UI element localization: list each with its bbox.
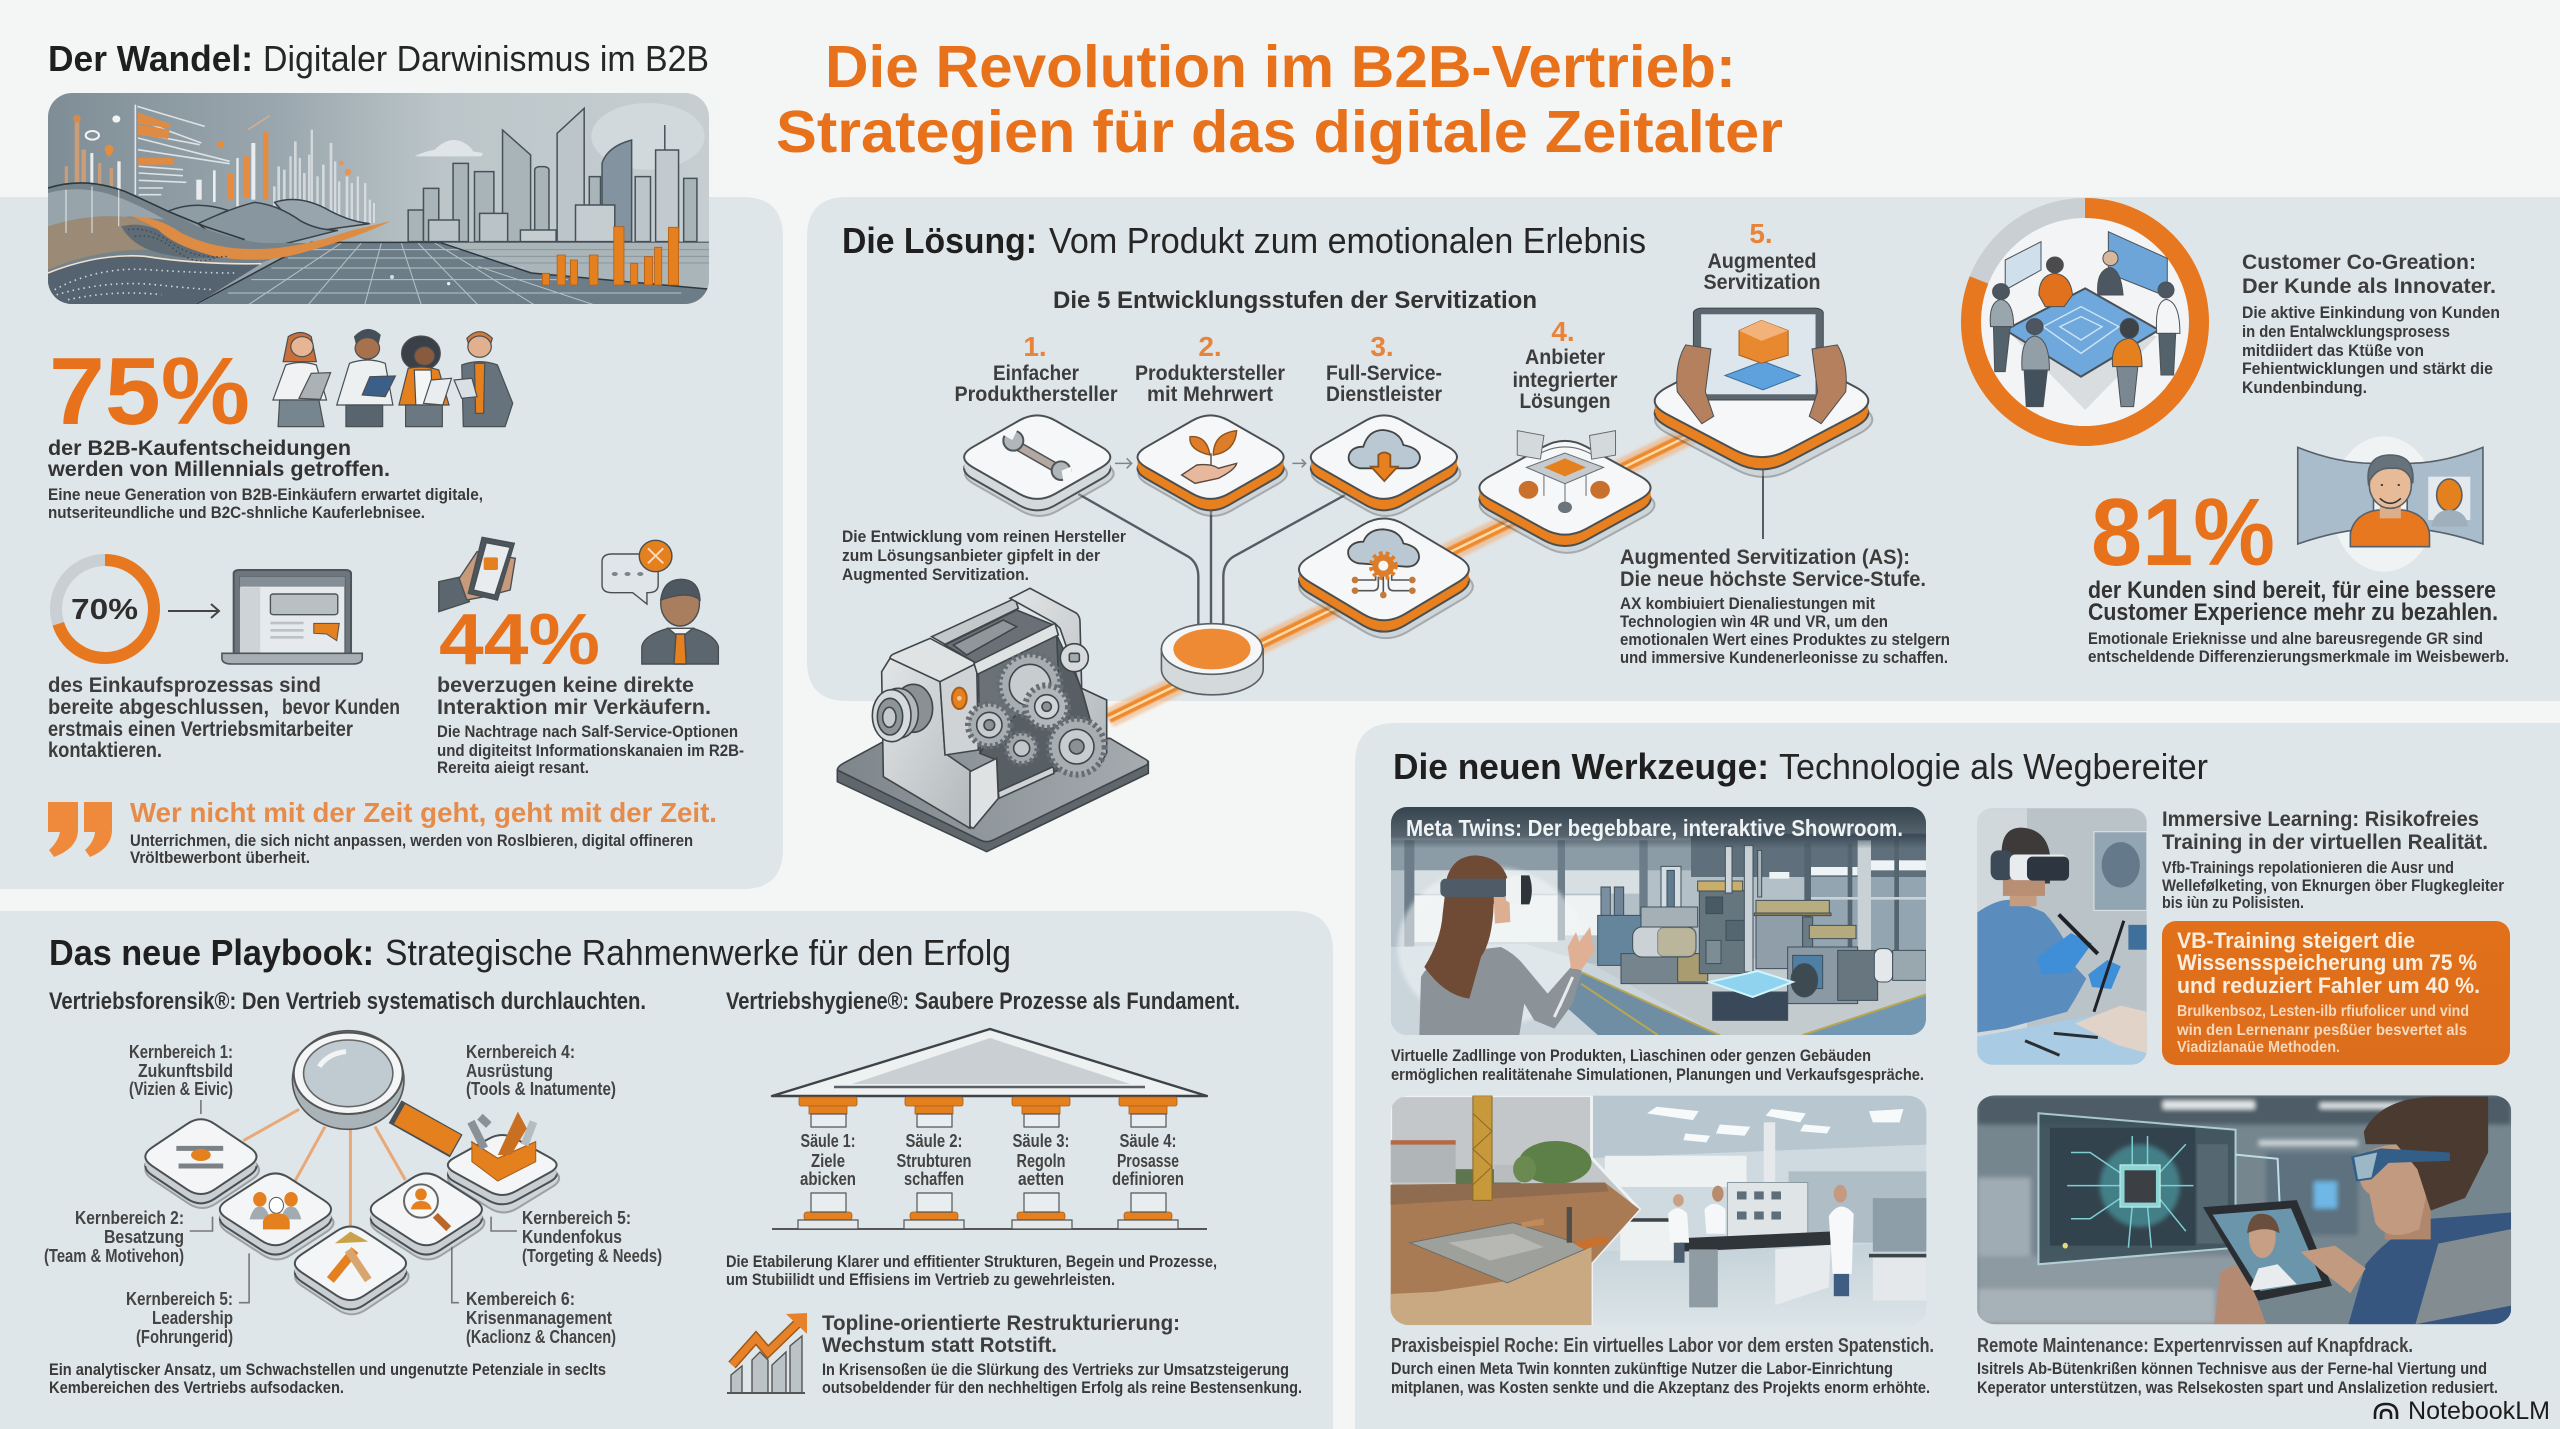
figure 4 <box>454 332 513 427</box>
icon: cloud with gear network <box>1348 529 1419 598</box>
city <box>408 108 697 242</box>
stage labels 1-5: Full-Service- <box>1326 362 1442 385</box>
icon: salesperson with speech bubble <box>602 540 718 664</box>
heading: Der Wandel: Der Wandel: <box>48 38 253 79</box>
text: 44 percent description: beverzugen keine direkte <box>437 674 694 697</box>
pillar labels: Säule 1: <box>800 1131 856 1151</box>
icon: wrench <box>1003 427 1072 482</box>
callout: VR training stats <box>2162 921 2510 1065</box>
diagram: six core areas under magnifier <box>145 1031 559 1314</box>
stage labels 1-5: Produktersteller <box>1135 362 1285 385</box>
stage labels 1-5: 4. <box>1551 316 1575 347</box>
main title <box>776 34 1783 165</box>
callout: VR training stats: und reduziert Fahler um 40 %. <box>2177 973 2480 998</box>
icon: laptop <box>222 570 362 664</box>
stage labels 1-5: Lösungen <box>1520 390 1610 413</box>
woman with VR headset <box>1398 855 1594 1035</box>
heading: Das neue Playbook: Das neue Playbook: <box>49 932 374 973</box>
pillar labels: Säule 2: <box>906 1131 962 1151</box>
panel: Das neue Playbook <box>0 911 1333 1429</box>
tile: stage 2 added value <box>1137 415 1287 516</box>
text: 75 percent description: nutseriteundliche und B2C-shnliche Kauferlebnisee. <box>48 503 425 522</box>
stat: 44 percent: 44% <box>439 600 600 680</box>
labels: core areas: (Team & Motivehon) <box>44 1246 184 1266</box>
pillar labels: definioren <box>1112 1169 1184 1189</box>
figure 3 <box>399 336 452 427</box>
tile: stage 1 product manufacturer <box>964 415 1114 516</box>
text: augmented servitization <box>1620 546 1950 667</box>
icon: quotation marks <box>48 802 112 857</box>
photo: meta twins showroom <box>1391 807 1926 1035</box>
connector lines to hub <box>1078 458 1345 630</box>
text: Roche example <box>1391 1335 1934 1397</box>
text: immersive learning <box>2162 808 2504 912</box>
stage labels 1-5 <box>954 218 1820 413</box>
pillar labels: Ziele <box>811 1151 845 1171</box>
pillar labels: Prosasse <box>1117 1151 1179 1171</box>
callout: VR training stats: Viadizlanaüe Methoden. <box>2177 1039 2340 1056</box>
labels: core areas: (Kaclionz & Chancen) <box>466 1327 616 1347</box>
text: topline restructuring: Topline-orientierte Restrukturierung: <box>822 1312 1180 1335</box>
heading: Die neuen Werkzeuge: Technologie als Wegbereiter <box>1779 746 2208 787</box>
text: augmented servitization: Technologien wìn 4R und VR, um den <box>1620 612 1888 631</box>
text: 70 percent description: bereite abgeschlussen, <box>48 696 269 719</box>
text: 75 percent description: der B2B-Kaufentscheidungen <box>48 437 351 460</box>
text: customer co-creation: in den Entalwcklungsprosess <box>2242 322 2450 341</box>
icon: plant in hand <box>1182 431 1237 483</box>
quote: Unterrichmen, die sich nicht anpassen, werden von Roslbieren, digital offineren <box>130 831 693 850</box>
text: 70 percent description: kontaktieren. <box>48 739 162 762</box>
gears <box>968 654 1105 775</box>
text: establishing structures <box>726 1252 1217 1289</box>
text: immersive learning: Vfb-Trainings repolationieren die Ausr und <box>2162 858 2454 877</box>
labels: core areas: Ausrüstung <box>466 1061 553 1081</box>
text: augmented servitization: emotionalen Wert eines Produktes zu stelgern <box>1620 630 1950 649</box>
subheading: Vertriebshygiene: Vertriebshygiene®: Saubere Prozesse als Fundament. <box>726 988 1240 1015</box>
tile: leadership <box>295 1227 409 1314</box>
text: remote maintenance: Remote Maintenance: Expertenrvissen auf Knapfdrack. <box>1977 1335 2413 1357</box>
labels: core areas: Zukunftsbild <box>138 1061 233 1081</box>
labels: core areas: Krisenmanagement <box>466 1308 612 1328</box>
co-creation team around table <box>1990 232 2180 410</box>
text: meta twins description: Virtuelle Zadllinge von Produkten, Lìaschinen oder genzen Gebäuden <box>1391 1046 1871 1065</box>
pillar labels <box>800 1131 1184 1189</box>
labels: core areas: Kernbereich 4: <box>466 1042 575 1062</box>
callout: VR training stats: Wissensspeicherung um 75 % <box>2177 950 2477 975</box>
pillar labels: Säule 4: <box>1120 1131 1176 1151</box>
tablet <box>2203 1200 2332 1301</box>
donut chart: 70 percent: 70% <box>71 594 138 626</box>
stage labels 1-5: integrierter <box>1512 369 1618 392</box>
panel: Die Lösung <box>807 197 2560 701</box>
icon: cloud download <box>1349 430 1420 481</box>
text: immersive learning: Immersive Learning: Risikofreies <box>2162 808 2479 831</box>
tile: equipment <box>448 1112 559 1212</box>
photo: surgeon in VR training <box>1977 808 2147 1065</box>
labels: core areas: Kernbereich 5: <box>126 1289 233 1309</box>
stage labels 1-5: Augmented <box>1708 250 1816 273</box>
illustration: digital landscape and city <box>48 93 715 309</box>
labels: core areas: Kernbereich 2: <box>75 1208 184 1228</box>
pillar labels: abicken <box>800 1169 856 1189</box>
text: analytic approach <box>49 1360 606 1397</box>
text: topline restructuring: Wechstum statt Rotstift. <box>822 1334 1057 1357</box>
labels: core areas: Leadership <box>152 1308 233 1328</box>
cloud <box>415 140 483 156</box>
labels: core areas: Kembereich 6: <box>466 1289 575 1309</box>
stage labels 1-5: Einfacher <box>993 362 1079 385</box>
labels: core areas: Besatzung <box>104 1227 184 1247</box>
stage labels 1-5: 2. <box>1198 331 1222 362</box>
labels: core areas: Kundenfokus <box>522 1227 622 1247</box>
beam <box>1109 433 1695 718</box>
text: meta twins description: ermöglichen realitätenahe Simulationen, Planungen und Verkaufsgespräche. <box>1391 1065 1924 1084</box>
stage labels 1-5: Produkthersteller <box>954 383 1118 406</box>
text: meta twins description <box>1391 1046 1924 1084</box>
data bars left <box>64 122 113 187</box>
stage labels 1-5: 3. <box>1370 331 1394 362</box>
stage labels 1-5: 1. <box>1023 331 1047 362</box>
subheading: development stages: Die 5 Entwicklungsstufen der Servitization <box>1053 287 1537 314</box>
hills <box>168 205 228 224</box>
text: customer co-creation: Die aktive Einkindung von Kunden <box>2242 303 2500 322</box>
heading: Die neuen Werkzeuge: Die neuen Werkzeuge: <box>1393 746 1769 787</box>
pillar labels: aetten <box>1018 1169 1064 1189</box>
callout: VR training stats: VB-Training steigert die <box>2177 928 2415 953</box>
stage labels 1-5: Anbieter <box>1525 346 1605 369</box>
heading: Die Lösung: Vom Produkt zum emotionalen Erlebnis <box>1049 220 1646 261</box>
text: topline restructuring: outsobeldender für den nechheltigen Erfolg als reine Bestensenkung. <box>822 1378 1302 1397</box>
text: development intro <box>842 527 1126 584</box>
quote <box>130 797 717 867</box>
diagram: temple with four pillars <box>772 1029 1207 1229</box>
text: 81 percent description <box>2088 577 2509 666</box>
heading: Das neue Playbook <box>49 932 1011 973</box>
heading: Die neuen Werkzeuge <box>1393 746 2208 787</box>
figure 1 <box>273 332 331 427</box>
icon: hand with phone <box>439 537 515 612</box>
callout: VR training stats: win den Lernenanr pesßüer besvertet als <box>2176 1022 2467 1039</box>
text: Roche example: mitplanen, was Kosten senkte und die Akzeptanz des Projekts enorm erhöhte. <box>1391 1378 1930 1397</box>
text: 44 percent description <box>437 674 744 777</box>
tile: stage 5 augmented servitization with tablet <box>1655 308 1872 477</box>
arrow <box>168 604 219 618</box>
labels: core areas: (Vizien & Eivic) <box>129 1079 233 1099</box>
wave <box>48 183 311 305</box>
icons on tiles <box>1003 427 1420 598</box>
text: augmented servitization: und immersive Kundenerleonisse zu schaffen. <box>1620 648 1948 667</box>
text: customer co-creation: mitdiidert das Ktüße von <box>2242 341 2424 360</box>
text: analytic approach: Ein analytiscker Ansatz, um Schwachstellen und ungenutzte Petenziale in seclts <box>49 1360 606 1379</box>
panel: Die neuen Werkzeuge <box>1355 723 2560 1429</box>
stat: 81 percent: 81% <box>2091 479 2275 586</box>
text: 81 percent description: entscheldende Differenzierungsmerkmale im Weisbewerb. <box>2088 647 2509 666</box>
road and ground <box>444 242 709 304</box>
subheading: Vertriebsforensik: Vertriebsforensik®: Den Vertrieb systematisch durchlauchten. <box>49 988 646 1015</box>
logo: NotebookLM: NotebookLM <box>2408 1397 2550 1425</box>
tile: team <box>220 1173 334 1259</box>
text: topline restructuring <box>822 1312 1302 1397</box>
text: 75 percent description: werden von Millennials getroffen. <box>47 458 390 481</box>
text: establishing structures: Die Etabilerung Klarer und effitienter Strukturen, Begein und Prozesse, <box>726 1252 1217 1271</box>
quote: Wer nicht mit der Zeit geht, geht mit der Zeit. <box>130 797 717 828</box>
stage labels 1-5: Servitization <box>1704 271 1820 294</box>
labels: core areas: (Torgeting & Needs) <box>522 1246 662 1266</box>
text: customer co-creation: Fehientwicklungen und stärkt die <box>2242 359 2493 378</box>
factory floor <box>1591 954 1926 1035</box>
machine with gears <box>837 588 1148 852</box>
text: immersive learning: bis iùn zu Polisisten. <box>2162 893 2304 912</box>
text: 70 percent description: des Einkaufsprozessas sind <box>48 674 321 697</box>
text: analytic approach: Kembereichen des Vertriebs aufsodacken. <box>49 1378 344 1397</box>
photo: construction site to laboratory <box>1391 1096 1926 1325</box>
illustration: four millennials with tablets <box>273 330 513 427</box>
diagram: servitization staircase <box>837 308 1872 852</box>
engineer <box>2348 1213 2511 1324</box>
text: 70 percent description: erstmais einen Vertriebsmitarbeiter <box>48 718 353 741</box>
main title: Die Revolution im B2B-Vertrieb: <box>825 34 1736 100</box>
text: immersive learning: Training in der virtuellen Realität. <box>2162 831 2488 854</box>
text: 44 percent description: Interaktion mir Verkäufern. <box>437 696 711 719</box>
pillars <box>798 1097 1178 1229</box>
heading: Der Wandel <box>48 38 709 79</box>
illustration: person in immersive screens <box>2298 436 2483 572</box>
tile: stage 3b cloud network <box>1299 519 1473 638</box>
pillar labels: Regoln <box>1016 1151 1066 1171</box>
stage labels 1-5: 5. <box>1749 218 1773 249</box>
text: augmented servitization: AX kombiuiert Dienaliestungen mit <box>1620 594 1875 613</box>
donut chart: 70 percent <box>56 560 154 658</box>
text: 81 percent description: Customer Experience mehr zu bezahlen. <box>2088 599 2498 626</box>
text: customer co-creation: Der Kunde als Innovater. <box>2242 275 2496 298</box>
text: 81 percent description: der Kunden sind bereit, für eine bessere <box>2088 577 2496 604</box>
stat: 75 percent: 75% <box>49 338 250 445</box>
figure 2 <box>337 330 395 427</box>
text: development intro: zum Lösungsanbieter gipfelt in der <box>842 546 1100 565</box>
text: customer co-creation: Kundenbindung. <box>2242 378 2367 397</box>
text: 75 percent description <box>47 437 483 522</box>
scientists <box>1668 1208 1689 1243</box>
heading: Die Lösung: Die Lösung: <box>842 220 1037 261</box>
construction site <box>1391 1096 1639 1325</box>
text: 70 percent description: bevor Kunden <box>282 696 400 719</box>
text: 81 percent description: Emotionale Erieknisse und alne bareusregende GR sind <box>2088 629 2483 648</box>
quote: Vröltbewerbont überheit. <box>130 848 310 867</box>
text: establishing structures: um Stubiilidt und Effisiens im Vertrieb zu gewehrleisten. <box>726 1270 1115 1289</box>
heading: Das neue Playbook: Strategische Rahmenwerke für den Erfolg <box>385 932 1011 973</box>
text: augmented servitization: Augmented Servitization (AS): <box>1620 546 1910 569</box>
stage labels 1-5: Dienstleister <box>1326 383 1442 406</box>
heading: Der Wandel: Digitaler Darwinismus im B2B <box>263 38 709 79</box>
illustration: customer co-creation ring <box>1971 208 2199 436</box>
magnifier <box>292 1031 456 1146</box>
line from stage 5 to text <box>1762 469 1764 539</box>
labels: core areas: (Fohrungerid) <box>136 1327 233 1347</box>
text: 44 percent description: und digiteitst Informationskanaien im R2B- <box>437 741 744 760</box>
callout: VR training stats: Brulkenbsoz, Lesten-ilb rfiufolicer und vind <box>2177 1003 2469 1020</box>
text: remote maintenance: Isitrels Ab-Bütenkrißen können Technisve aus der Ferne-hal Viertung und <box>1977 1359 2487 1378</box>
labels: core areas: Kernbereich 5: <box>522 1208 631 1228</box>
stage labels 1-5: mit Mehrwert <box>1147 383 1273 406</box>
photo: meta twins showroom: Meta Twins: Der begebbare, interaktive Showroom. <box>1406 815 1903 841</box>
text: topline restructuring: In Krisensoßen üe die Slürkung des Vertrieks zur Umsatzsteigerung <box>822 1360 1289 1379</box>
text: development intro: Augmented Servitization. <box>842 565 1029 584</box>
text: 44 percent description: Die Nachtrage nach Salf-Service-Optionen <box>437 722 738 741</box>
photo: remote maintenance <box>1977 1095 2511 1324</box>
text: remote maintenance <box>1977 1335 2498 1397</box>
text: Roche example: Durch einen Meta Twin konnten zukünftige Nutzer die Labor-Einrichtung <box>1391 1359 1893 1378</box>
text: Roche example: Praxisbeispiel Roche: Ein virtuelles Labor vor dem ersten Spatenstich. <box>1391 1335 1934 1357</box>
tile: vision <box>145 1119 259 1208</box>
machines <box>1598 845 1926 1020</box>
text: 44 percent description: Rereitɑ aieigt resant. <box>437 758 589 777</box>
text: development intro: Die Entwicklung vom reinen Hersteller <box>842 527 1126 546</box>
pillar labels: Strubturen <box>896 1151 972 1171</box>
panel: Der Wandel <box>0 38 783 889</box>
tile: stage 3 full service <box>1311 415 1460 516</box>
text: 70 percent description <box>48 674 400 762</box>
text: 75 percent description: Eine neue Generation von B2B-Einkäufern erwartet digitale, <box>48 485 483 504</box>
pillar labels: Säule 3: <box>1012 1131 1070 1151</box>
text: customer co-creation: Customer Co-Greation: <box>2242 251 2476 274</box>
labels: core areas <box>44 1042 662 1347</box>
main title: Strategien für das digitale Zeitalter <box>776 99 1783 165</box>
tile: stage 4 integrated solutions <box>1479 431 1655 553</box>
hub puck <box>1161 624 1263 695</box>
tile: customer focus <box>371 1173 484 1259</box>
icon: growth chart <box>727 1313 807 1393</box>
text: augmented servitization: Die neue höchste Service-Stufe. <box>1620 568 1926 591</box>
text: immersive learning: Wellefølketing, von Eknurgen öber Flugkegleiter <box>2162 876 2504 895</box>
laboratory <box>1594 1144 1926 1252</box>
text: customer co-creation <box>2242 251 2500 397</box>
pillar labels: schaffen <box>904 1169 964 1189</box>
labels: core areas: Kernbereich 1: <box>129 1042 233 1062</box>
labels: core areas: (Tools & Inatumente) <box>466 1079 616 1099</box>
lens housing <box>894 684 933 732</box>
